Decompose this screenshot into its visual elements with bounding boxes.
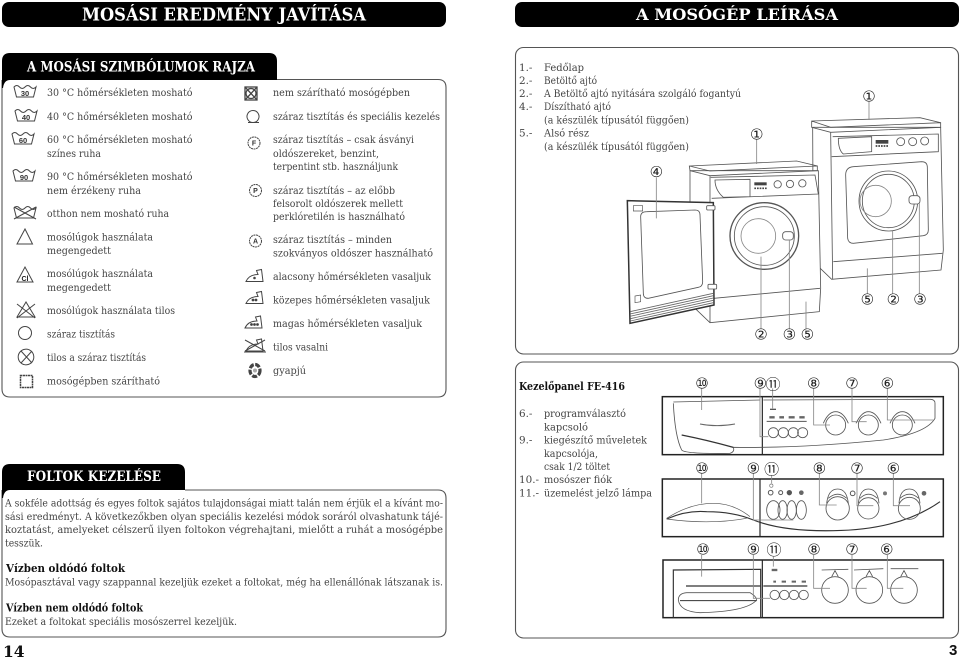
control panel heading: Kezelőpanel FE-416 xyxy=(519,380,625,393)
water soluble stains xyxy=(5,562,443,588)
left column text xyxy=(47,86,192,388)
parts list: Betöltő ajtó xyxy=(544,74,597,87)
callout numbers: ② xyxy=(887,290,900,308)
left column text: 40 °C hőmérsékleten mosható xyxy=(47,110,192,123)
panel tab heading xyxy=(2,464,185,498)
icon: iron medium xyxy=(246,292,263,304)
icon: dry clean F xyxy=(248,137,260,149)
icon: iron high xyxy=(245,316,262,328)
control panel A xyxy=(662,388,943,455)
heading bar: A mosógép leírása: A MOSÓGÉP LEÍRÁSA xyxy=(635,4,839,24)
water soluble stains: Mosópasztával vagy szappannal kezeljük ezeket a foltokat, még ha ellenállónak látszanak is. xyxy=(5,576,443,588)
left column text: megengedett xyxy=(47,245,112,257)
callout numbers: ⑤ xyxy=(861,290,874,308)
icon: dry clean xyxy=(18,326,32,340)
parts list: A Betöltő ajtó nyitására szolgáló fogantyú xyxy=(543,87,741,100)
control panel callout numbers: ⑩ xyxy=(695,375,709,393)
icon: wash 90: 90 xyxy=(20,173,28,182)
parts list xyxy=(519,61,741,153)
right column text: terpentint stb. használjunk xyxy=(273,161,399,173)
icon: wash 60: 60 xyxy=(19,136,27,145)
icon: dry clean special xyxy=(247,110,259,123)
water soluble stains: Vízben oldódó foltok xyxy=(5,562,125,575)
water insoluble stains: Ezeket a foltokat speciális mosószerrel kezeljük. xyxy=(5,616,237,628)
callout numbers: ④ xyxy=(650,163,663,181)
left column text: száraz tisztítás xyxy=(47,328,115,340)
panel frame xyxy=(2,80,446,397)
right column text: oldószereket, benzint, xyxy=(273,148,379,160)
control parts list xyxy=(519,408,652,500)
icon: no ironing xyxy=(244,339,266,352)
parts list: 5.- xyxy=(519,128,533,140)
panel tab heading: A MOSÁSI SZIMBÓLUMOK RAJZA xyxy=(26,58,256,76)
callout numbers: ① xyxy=(750,126,763,144)
right column text: szokványos oldószer használható xyxy=(273,248,433,260)
icon: dry clean F: F xyxy=(252,140,257,148)
stain intro paragraph: koztatást, amelyeket célszerű ilyen foltokon végrehajtani, mielőtt a ruhát a mosógépbe xyxy=(5,523,443,536)
panel: wash symbols xyxy=(2,53,446,397)
icon: dry clean A xyxy=(250,235,262,247)
control panel callout numbers: ⑥ xyxy=(881,375,894,393)
control panel callout numbers: ⑨ xyxy=(747,460,760,478)
left machine xyxy=(689,161,821,323)
icon: iron low xyxy=(246,270,263,282)
parts list: (a készülék típusától függően) xyxy=(544,140,689,153)
callout numbers xyxy=(650,88,927,344)
leader lines xyxy=(656,102,919,329)
callout numbers: ⑤ xyxy=(801,326,814,344)
control panel callout numbers: ⑩ xyxy=(696,540,710,558)
icon: wash 90 xyxy=(13,170,35,182)
panel frame xyxy=(516,362,958,638)
right column text: magas hőmérsékleten vasaljuk xyxy=(273,317,423,330)
left column text: 60 °C hőmérsékleten mosható xyxy=(47,133,192,146)
icon: wool mark xyxy=(250,364,260,376)
right column text: perklóretilén is használható xyxy=(273,211,405,223)
control panel callout numbers: ⑧ xyxy=(813,460,826,478)
parts list: Alsó rész xyxy=(543,128,589,140)
right column text: száraz tisztítás – minden xyxy=(273,234,392,246)
control parts list: 10.- xyxy=(519,474,540,486)
right column text: felsorolt oldószerek mellett xyxy=(273,198,404,210)
control panel callout numbers xyxy=(695,375,900,559)
callout numbers: ③ xyxy=(913,290,927,308)
right machine xyxy=(812,118,943,279)
panel frame xyxy=(2,490,446,637)
control panel drawings xyxy=(662,375,943,618)
water insoluble stains xyxy=(5,602,237,628)
left column text: mosólúgok használata tilos xyxy=(47,305,175,317)
control parts list: 9.- xyxy=(519,434,533,446)
panel: control panel FE-416 xyxy=(516,362,958,638)
icon: wash 40 xyxy=(15,110,37,122)
control panel callout numbers: ⑧ xyxy=(807,375,820,393)
left column text: nem érzékeny ruha xyxy=(47,185,141,197)
control panel callout numbers: ⑥ xyxy=(880,540,893,558)
icon: wash 30 xyxy=(14,86,36,98)
panel tab heading: FOLTOK KEZELÉSE xyxy=(27,467,161,485)
icon: wash 30: 30 xyxy=(21,89,29,98)
callout numbers: ③ xyxy=(783,326,796,344)
open door xyxy=(627,201,717,323)
right column text: tilos vasalni xyxy=(273,342,329,354)
icon: bleach triangle xyxy=(17,229,32,244)
icon: no bleach xyxy=(17,302,35,318)
control parts list: programválasztó xyxy=(544,408,626,420)
parts list: (a készülék típusától függően) xyxy=(544,114,689,126)
stain intro paragraph: sási eredményt. A következőkben olyan speciális kezelési módok soráról olvashatunk tájé- xyxy=(5,510,443,523)
control panel callout numbers: ⑪ xyxy=(764,460,779,478)
left column text: mosógépben szárítható xyxy=(47,376,160,388)
heading bar: Mosási eredmény javítása: MOSÁSI EREDMÉNY JAVÍTÁSA xyxy=(82,2,367,26)
stain intro paragraph: tesszük. xyxy=(5,538,43,550)
control panel callout numbers: ⑦ xyxy=(845,375,859,393)
control parts list: üzemelést jelző lámpa xyxy=(544,486,652,500)
icon: chlorine triangle xyxy=(17,267,33,283)
parts list: 4.- xyxy=(519,101,533,113)
right column text: közepes hőmérsékleten vasaljuk xyxy=(273,294,431,306)
control panel C xyxy=(663,555,943,618)
heading bar: A mosógép leírása xyxy=(515,2,959,27)
stain intro paragraph: A sokféle adottság és egyes foltok sajátos tulajdonságai miatt talán nem érjük el a kívánt mo- xyxy=(4,498,443,510)
icon: dry clean P xyxy=(250,184,262,196)
right column text: száraz tisztítás – csak ásványi xyxy=(273,134,415,146)
left column text: otthon nem mosható ruha xyxy=(47,208,169,220)
control panel callout numbers: ⑪ xyxy=(766,375,781,393)
right column text: száraz tisztítás – az előbb xyxy=(273,184,395,197)
icon: dry clean A: A xyxy=(253,238,258,246)
right column text: alacsony hőmérsékleten vasaljuk xyxy=(273,270,432,283)
control panel callout numbers: ⑨ xyxy=(747,540,760,558)
control panel callout numbers: ⑩ xyxy=(695,460,709,478)
icon: no dry clean xyxy=(18,349,34,365)
parts list: Fedőlap xyxy=(544,61,584,74)
panel: machine description xyxy=(516,48,958,354)
icon: wash 60 xyxy=(12,132,34,145)
left column text: 90 °C hőmérsékleten mosható xyxy=(47,170,192,183)
control parts list: 6.- xyxy=(519,408,533,420)
icon: dry clean P: P xyxy=(253,188,258,195)
heading bar: Mosási eredmény javítása xyxy=(2,2,446,27)
control parts list: mosószer fiók xyxy=(544,474,613,486)
parts list: 2.- xyxy=(519,75,533,87)
control panel callout numbers: ⑧ xyxy=(807,540,821,558)
parts list: 2.- xyxy=(519,88,533,100)
panel tab heading xyxy=(2,53,277,88)
callout numbers: ② xyxy=(754,326,768,344)
washing machine drawings xyxy=(627,88,943,344)
control parts list: kiegészítő műveletek xyxy=(544,434,648,446)
icon: tumble dry xyxy=(20,376,32,388)
control panel callout numbers: ⑦ xyxy=(845,540,859,558)
left column text: mosólúgok használata xyxy=(47,268,153,280)
control parts list: csak 1/2 töltet xyxy=(544,461,611,473)
left column text: mosólúgok használata xyxy=(47,232,153,244)
panel: stain treatment xyxy=(2,464,446,637)
left column text: megengedett xyxy=(47,282,112,294)
control parts list: kapcsolója, xyxy=(544,448,598,460)
right column text: gyapjú xyxy=(273,365,306,377)
water insoluble stains: Vízben nem oldódó foltok xyxy=(5,602,143,614)
stain intro paragraph xyxy=(4,498,443,550)
left column text: tilos a száraz tisztítás xyxy=(47,352,146,364)
control panel callout numbers: ⑥ xyxy=(887,460,900,478)
icon: wash 40: 40 xyxy=(22,113,30,122)
right column text xyxy=(273,87,440,377)
control panel B xyxy=(662,473,943,537)
control panel callout numbers: ⑨ xyxy=(754,375,767,393)
control parts list: kapcsoló xyxy=(544,422,588,434)
right column text: száraz tisztítás és speciális kezelés xyxy=(273,111,440,123)
parts list: Díszítható ajtó xyxy=(544,101,611,113)
icon: no tumble dry xyxy=(245,87,257,100)
callout numbers: ① xyxy=(862,88,876,106)
icon: chlorine triangle: Cl xyxy=(22,276,29,283)
parts list: 1.- xyxy=(519,62,533,74)
icon: no washing xyxy=(14,206,36,219)
left column text: 30 °C hőmérsékleten mosható xyxy=(47,86,192,99)
right column text: nem szárítható mosógépben xyxy=(273,87,410,99)
control panel callout numbers: ⑦ xyxy=(850,460,864,478)
control panel callout numbers: ⑪ xyxy=(767,541,782,559)
panel frame xyxy=(516,48,958,354)
control parts list: 11.- xyxy=(519,488,540,500)
left column text: színes ruha xyxy=(47,148,101,160)
